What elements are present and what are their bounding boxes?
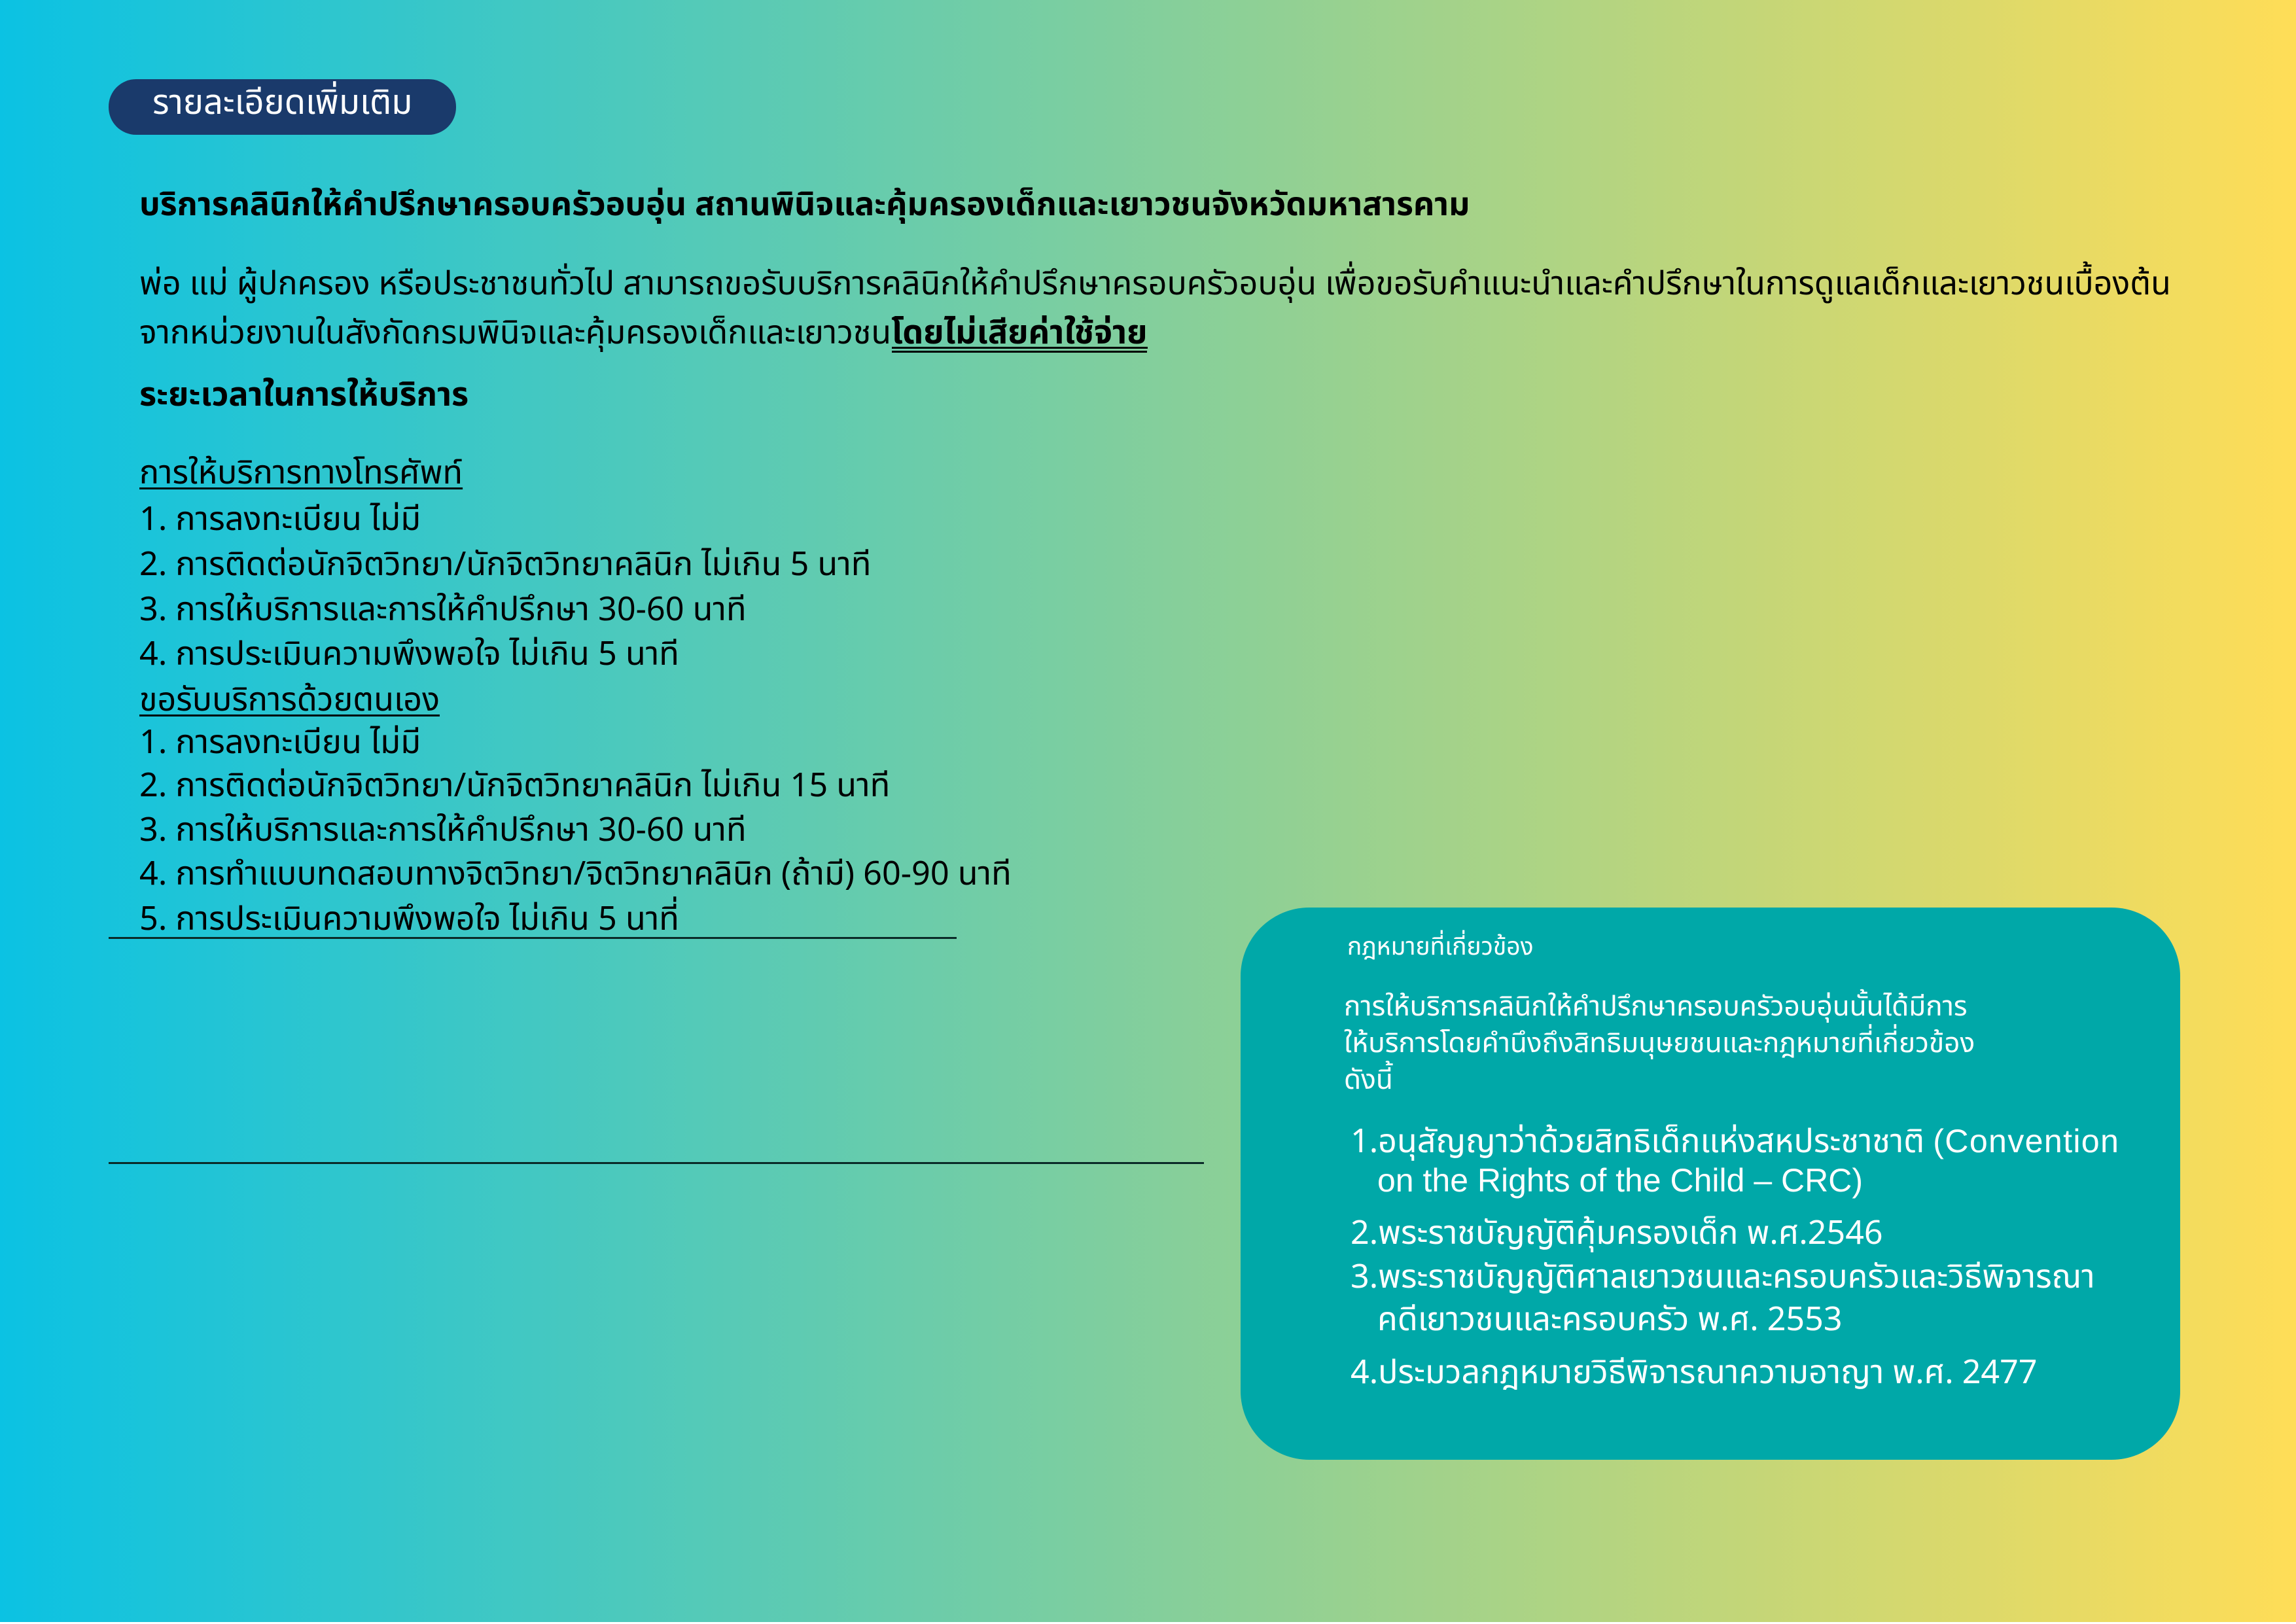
panel: related laws: [1241, 908, 2180, 1460]
intro line 1: พ่อ แม่ ผู้ปกครอง หรือประชาชนทั่วไป สามารถขอรับบริการคลินิกให้คำปรึกษาครอบครัวอบอุ่น เพื่อขอรับคำแนะนำและคำปรึกษาในการดูแลเด็กและเยาวชนเบื้องต้น: [139, 260, 2171, 309]
panel heading: กฎหมายที่เกี่ยวข้อง: [1347, 929, 1534, 966]
telephone step 3: 3. การให้บริการและการให้คำปรึกษา 30-60 นาที: [139, 586, 747, 635]
list: walk-in service: [139, 676, 1012, 945]
law 3 line 2: คดีเยาวชนและครอบครัว พ.ศ. 2553: [1377, 1296, 1843, 1345]
law 3 line 1: 3.พระราชบัญญัติศาลเยาวชนและครอบครัวและวิธีพิจารณา: [1351, 1253, 2095, 1303]
walk-in step 1: 1. การลงทะเบียน ไม่มี: [139, 718, 421, 768]
intro line 2: จากหน่วยงานในสังกัดกรมพินิจและคุ้มครองเด็กและเยาวชนโดยไม่เสียค่าใช้จ่าย: [139, 308, 1148, 359]
pill heading text: รายละเอียดเพิ่มเติม: [152, 77, 412, 130]
walk-in step 5: 5. การประเมินความพึงพอใจ ไม่เกิน 5 นาที่: [139, 895, 679, 945]
law 4: 4.ประมวลกฎหมายวิธีพิจารณาความอาญา พ.ศ. 2477: [1351, 1349, 2038, 1398]
law 1 line 1: 1.อนุสัญญาว่าด้วยสิทธิเด็กแห่งสหประชาชาติ (Convention: [1351, 1118, 2119, 1167]
pill heading: more details: [109, 79, 456, 135]
law 2: 2.พระราชบัญญัติคุ้มครองเด็ก พ.ศ.2546: [1351, 1209, 1883, 1259]
walk-in step 3: 3. การให้บริการและการให้คำปรึกษา 30-60 นาที: [139, 806, 747, 856]
double underline: [892, 347, 1148, 353]
panel intro line 1: การให้บริการคลินิกให้คำปรึกษาครอบครัวอบอุ่นนั้นได้มีการ: [1344, 987, 1968, 1029]
walk-in subheading: ขอรับบริการด้วยตนเอง: [139, 676, 440, 726]
telephone step 1: 1. การลงทะเบียน ไม่มี: [139, 495, 421, 545]
section title: บริการคลินิกให้คำปรึกษาครอบครัวอบอุ่น สถานพินิจและคุ้มครองเด็กและเยาวชนจังหวัดมหาสารคาม: [139, 181, 1470, 230]
heading: service duration: ระยะเวลาในการให้บริการ: [139, 371, 468, 421]
intro paragraph: [139, 260, 2171, 359]
list: telephone service: [139, 449, 871, 680]
panel intro line 3: ดังนี้: [1344, 1060, 1393, 1102]
telephone subheading: การให้บริการทางโทรศัพท์: [139, 449, 463, 499]
panel intro line 2: ให้บริการโดยคำนึงถึงสิทธิมนุษยชนและกฎหมายที่เกี่ยวข้อง: [1344, 1023, 1975, 1065]
telephone step 4: 4. การประเมินความพึงพอใจ ไม่เกิน 5 นาที: [139, 630, 679, 680]
law 1 line 2: on the Rights of the Child – CRC): [1377, 1162, 1863, 1199]
walk-in step 4: 4. การทำแบบทดสอบทางจิตวิทยา/จิตวิทยาคลินิก (ถ้ามี) 60-90 นาที: [139, 850, 1012, 900]
telephone step 2: 2. การติดต่อนักจิตวิทยา/นักจิตวิทยาคลินิก ไม่เกิน 5 นาที: [139, 540, 871, 590]
walk-in step 2: 2. การติดต่อนักจิตวิทยา/นักจิตวิทยาคลินิก ไม่เกิน 15 นาที: [139, 762, 890, 811]
